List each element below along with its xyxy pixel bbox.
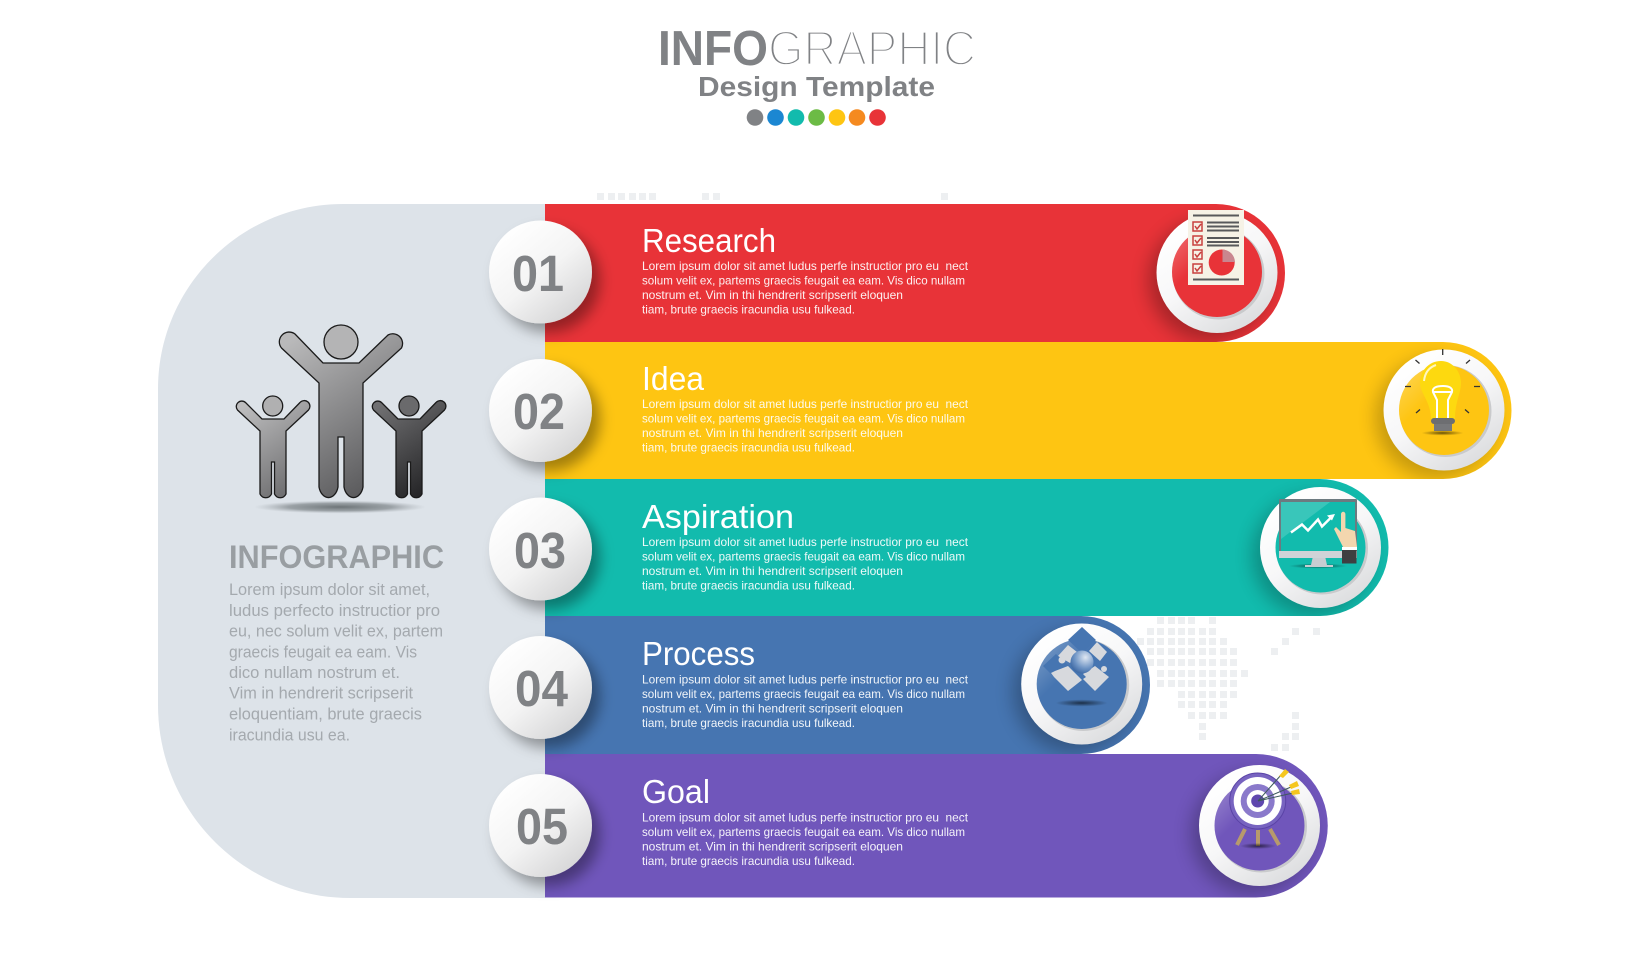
text block: nostrum et. Vim in thi hendrerit scripserit eloquen	[642, 426, 903, 440]
text block: tiam, brute graecis iracundia usu fulkead.	[642, 440, 855, 454]
number badge 01	[489, 220, 592, 324]
panel text	[229, 539, 444, 744]
panel paragraph: graecis feugait ea eam. Vis	[229, 642, 417, 662]
panel paragraph: Vim in hendrerit scripserit	[229, 684, 413, 702]
text block	[642, 535, 969, 592]
text block	[642, 397, 969, 454]
text block: Lorem ipsum dolor sit amet ludus perfe instructior pro eu nect	[642, 259, 969, 273]
text block: Lorem ipsum dolor sit amet ludus perfe instructior pro eu nect	[642, 535, 969, 549]
icon: monitor with rising chart on ring	[1252, 487, 1381, 616]
number badge 02	[489, 359, 592, 462]
text block: solum velit ex, partems graecis feugait ea eam. Vis dico nullam	[642, 412, 965, 426]
number badge 05	[489, 774, 592, 877]
number badge 04	[489, 636, 592, 739]
text block: solum velit ex, partems graecis feugait ea eam. Vis dico nullam	[642, 274, 965, 288]
band: 02 Idea	[545, 342, 1512, 479]
number badge 04: 04	[515, 660, 569, 717]
title block	[658, 22, 976, 126]
panel paragraph	[229, 580, 443, 744]
text block: Lorem ipsum dolor sit amet ludus perfe instructior pro eu nect	[642, 672, 969, 686]
panel paragraph: Lorem ipsum dolor sit amet,	[229, 580, 430, 599]
text block: tiam, brute graecis iracundia usu fulkead.	[642, 578, 855, 592]
title: thin GRAPHIC: GRAPHIC	[768, 22, 976, 76]
panel paragraph: eu, nec solum velit ex, partem	[229, 622, 443, 640]
subtitle: Design Template	[698, 71, 935, 102]
colour dots	[747, 109, 886, 126]
text block: tiam, brute graecis iracundia usu fulkead.	[642, 302, 855, 316]
icon: target with arrows on ring	[1191, 765, 1320, 894]
icon: puzzle pieces on ring	[1013, 624, 1142, 752]
number badge 02: 02	[513, 383, 565, 440]
background dotted world map	[597, 193, 1320, 751]
text block: solum velit ex, partems graecis feugait ea eam. Vis dico nullam	[642, 550, 965, 564]
text block: solum velit ex, partems graecis feugait ea eam. Vis dico nullam	[642, 687, 965, 701]
number badge 05: 05	[516, 798, 568, 855]
band: 01 Research	[545, 204, 1285, 342]
text block	[642, 259, 969, 316]
band: 03 Aspiration	[545, 479, 1388, 616]
text block: nostrum et. Vim in thi hendrerit scripserit eloquen	[642, 840, 903, 854]
heading: Idea	[642, 360, 705, 397]
text block: nostrum et. Vim in thi hendrerit scripserit eloquen	[642, 702, 903, 716]
text block: tiam, brute graecis iracundia usu fulkead.	[642, 854, 855, 868]
band: 04 Process	[545, 616, 1150, 754]
icon: light bulb on ring	[1376, 349, 1504, 478]
heading: Aspiration	[642, 498, 794, 535]
panel heading: INFOGRAPHIC	[229, 539, 444, 575]
text block	[642, 672, 969, 730]
title: INFOGRAPHIC: INFO	[658, 22, 768, 76]
panel paragraph: iracundia usu ea.	[229, 726, 350, 744]
heading: Process	[642, 635, 755, 672]
heading: Research	[642, 222, 776, 259]
number badge 03: 03	[514, 522, 566, 579]
icon: three people	[236, 325, 446, 514]
text block: Lorem ipsum dolor sit amet ludus perfe instructior pro eu nect	[642, 397, 969, 411]
icon: research document on ring	[1148, 210, 1278, 341]
panel paragraph: ludus perfecto instructior pro	[229, 601, 440, 620]
text block	[642, 810, 969, 868]
panel: left grey rounded panel	[158, 204, 545, 898]
heading: Goal	[642, 773, 710, 810]
panel paragraph: dico nullam nostrum et.	[229, 663, 400, 682]
text block: nostrum et. Vim in thi hendrerit scripserit eloquen	[642, 288, 903, 302]
text block: Lorem ipsum dolor sit amet ludus perfe instructior pro eu nect	[642, 810, 969, 824]
band: 05 Goal	[545, 754, 1328, 898]
number badge 01: 01	[512, 245, 564, 302]
text block: tiam, brute graecis iracundia usu fulkead.	[642, 716, 855, 730]
text block: solum velit ex, partems graecis feugait ea eam. Vis dico nullam	[642, 825, 965, 839]
panel paragraph: eloquentiam, brute graecis	[229, 704, 422, 724]
text block: nostrum et. Vim in thi hendrerit scripserit eloquen	[642, 564, 903, 578]
number badge 03	[489, 498, 592, 600]
